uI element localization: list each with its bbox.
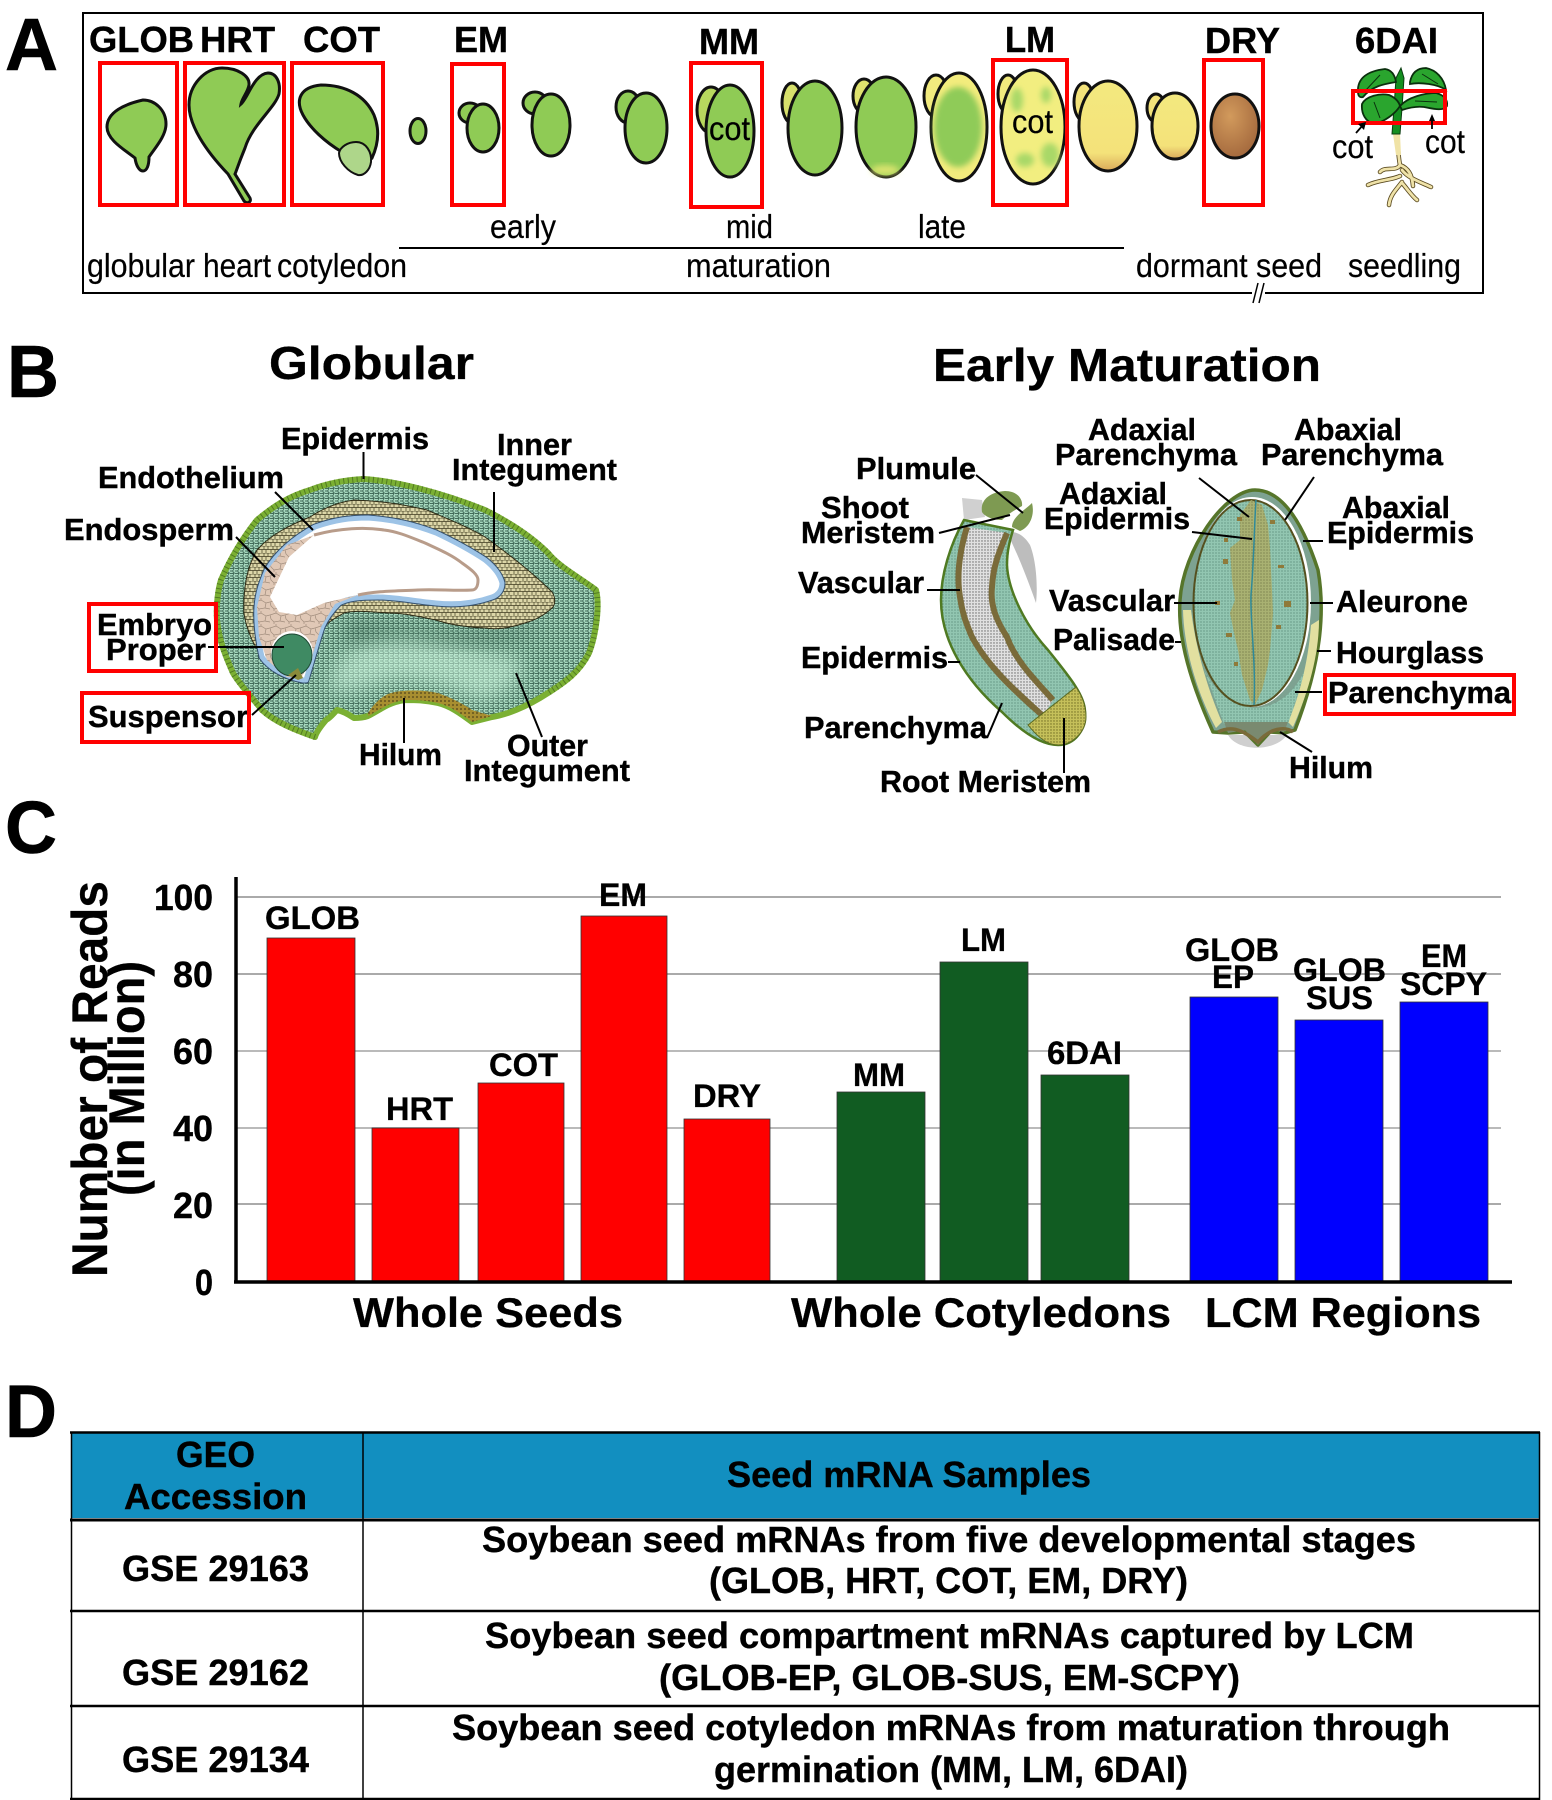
early maturation labels: Parenchyma — [1055, 437, 1238, 472]
suspensor highlight — [82, 693, 249, 742]
y-axis tick labels: 80 — [173, 954, 213, 995]
embryo proper highlight — [89, 604, 216, 671]
globular labels: Integument — [464, 753, 630, 788]
early maturation seed EM — [459, 103, 499, 152]
stage abbreviations — [89, 19, 1438, 62]
stage abbreviations: COT — [303, 19, 380, 60]
early maturation leader lines — [927, 475, 1333, 773]
panel letter D: D — [5, 1370, 57, 1453]
stage abbreviations: MM — [699, 21, 759, 62]
bar labels: SCPY — [1400, 966, 1487, 1002]
phase labels: early — [490, 208, 556, 245]
globular labels: Hilum — [359, 737, 442, 772]
early seed 2 — [523, 92, 570, 156]
mid seed 2 — [782, 81, 842, 175]
panel D: GEO accession table — [5, 1370, 1540, 1800]
cotyledon embryo — [299, 85, 378, 175]
panel B: seed anatomy — [7, 330, 1514, 799]
bar labels: EM — [599, 877, 647, 913]
phase labels: seedling — [1348, 247, 1461, 284]
row: GSE 29134 — [122, 1707, 1450, 1790]
y-axis tick labels: 60 — [173, 1031, 213, 1072]
early maturation labels: Parenchyma — [804, 710, 988, 745]
bar labels: LM — [961, 922, 1006, 958]
bar labels — [265, 877, 1487, 1127]
y-axis tick labels: 20 — [173, 1185, 213, 1226]
icon: seedling — [1358, 68, 1447, 205]
heading: Globular: Globular — [269, 337, 474, 389]
yellow seed — [1074, 81, 1137, 171]
axis break mark — [1253, 283, 1264, 303]
phase labels: maturation — [686, 247, 831, 284]
dry seed — [1211, 94, 1259, 158]
bar labels: GLOB — [1185, 932, 1279, 968]
globular labels: Inner — [497, 427, 572, 462]
table header text: GEO — [176, 1434, 255, 1475]
row: GSE 29162: Soybean seed compartment mRNAs captured by LCM — [485, 1615, 1414, 1656]
globular labels: Proper — [106, 632, 206, 667]
phase labels — [87, 208, 1461, 284]
early maturation labels: Epidermis — [1044, 501, 1190, 536]
stage abbreviations: GLOB — [89, 19, 194, 60]
group labels: Whole Cotyledons — [791, 1289, 1171, 1336]
stage abbreviations: HRT — [200, 19, 275, 60]
stage abbreviations: EM — [454, 19, 508, 60]
row: GSE 29162: GSE 29162 — [122, 1652, 309, 1693]
globular labels: Integument — [452, 452, 617, 487]
row: GSE 29163: Soybean seed mRNAs from five developmental stages — [482, 1519, 1416, 1560]
stage timeline frame — [83, 13, 1483, 293]
globular labels — [64, 421, 630, 788]
phase labels: late — [918, 208, 966, 245]
globular labels: Endothelium — [98, 460, 284, 495]
early maturation labels — [798, 412, 1512, 799]
heading: Early Maturation: Early Maturation — [933, 339, 1321, 391]
bar labels: DRY — [693, 1078, 761, 1114]
late seed 2 — [924, 73, 987, 181]
y-axis title — [62, 881, 155, 1277]
globular labels: Outer — [507, 728, 588, 763]
globular labels: Suspensor — [88, 699, 248, 734]
late maturation seed LM — [998, 70, 1065, 184]
row: GSE 29134: germination (MM, LM, 6DAI) — [714, 1749, 1188, 1790]
gridlines — [236, 897, 1501, 1204]
y-axis title: Number of Reads — [62, 881, 118, 1277]
cotyledon labels and arrows: cot — [1425, 123, 1465, 160]
early maturation labels: Palisade — [1053, 622, 1175, 657]
bar labels: SUS — [1306, 980, 1373, 1016]
table header fill — [71, 1433, 1540, 1518]
phase labels: globular — [87, 247, 195, 284]
early maturation labels: Root Meristem — [880, 764, 1091, 799]
panel letter C: C — [5, 786, 57, 869]
phase labels: dormant seed — [1136, 247, 1322, 284]
mid maturation seed MM — [697, 85, 754, 177]
row: GSE 29163 — [122, 1519, 1416, 1601]
stage abbreviations: DRY — [1205, 20, 1280, 61]
bar labels: HRT — [386, 1091, 453, 1127]
early maturation labels: Adaxial — [1059, 476, 1167, 511]
small early seed — [410, 118, 426, 144]
early maturation labels: Plumule — [856, 451, 976, 486]
panel A: seed development stages — [5, 3, 1483, 303]
red bars: whole seeds — [267, 916, 770, 1282]
heart embryo — [189, 68, 279, 203]
cotyledon labels and arrows: cot — [1332, 128, 1373, 165]
y-axis tick labels: 0 — [195, 1262, 213, 1303]
globular labels: Endosperm — [64, 512, 234, 547]
cotyledon labels and arrows — [709, 103, 1465, 165]
group labels: LCM Regions — [1205, 1289, 1481, 1336]
stage abbreviations: LM — [1005, 19, 1055, 60]
embryos and seeds — [107, 68, 1259, 203]
early maturation labels: Parenchyma — [1328, 675, 1512, 710]
bar labels: GLOB — [1293, 952, 1386, 988]
early maturation labels: Hourglass — [1336, 635, 1484, 670]
longitudinal embryo illustration — [941, 491, 1086, 745]
row: GSE 29134: Soybean seed cotyledon mRNAs from maturation through — [452, 1707, 1450, 1748]
row: GSE 29134: GSE 29134 — [122, 1739, 309, 1780]
bar labels: COT — [489, 1047, 558, 1083]
globular seed section illustration — [217, 479, 598, 737]
yellow seed small — [1147, 93, 1198, 159]
globular embryo — [107, 100, 166, 171]
cotyledon labels and arrows: cot — [709, 110, 750, 147]
row: GSE 29162: (GLOB-EP, GLOB-SUS, EM-SCPY) — [659, 1657, 1240, 1698]
early maturation labels: Shoot — [821, 490, 909, 525]
y-axis tick labels — [154, 877, 213, 1303]
parenchyma highlight — [1325, 675, 1514, 714]
phase labels: cotyledon — [277, 247, 407, 284]
phase labels: mid — [726, 208, 773, 245]
globular labels: Embryo — [97, 607, 212, 642]
early maturation labels: Abaxial — [1342, 490, 1450, 525]
globular labels: Epidermis — [281, 421, 429, 456]
stage abbreviations: 6DAI — [1355, 20, 1438, 61]
early maturation labels: Parenchyma — [1261, 437, 1444, 472]
early maturation labels: Hilum — [1289, 750, 1373, 785]
y-axis tick labels: 40 — [173, 1108, 213, 1149]
early seed 3 — [616, 91, 667, 163]
y-axis tick labels: 100 — [154, 877, 213, 918]
cross-section seed illustration — [1180, 490, 1321, 748]
row: GSE 29163: (GLOB, HRT, COT, EM, DRY) — [709, 1560, 1188, 1601]
early maturation labels: Vascular — [1049, 583, 1175, 618]
late seed 1 — [853, 77, 916, 177]
early maturation labels: Abaxial — [1294, 412, 1402, 447]
green bars: whole cotyledons — [837, 962, 1129, 1282]
table header text: Seed mRNA Samples — [727, 1454, 1091, 1495]
globular leader lines — [208, 452, 542, 743]
bar labels: GLOB — [265, 900, 360, 936]
table rules — [70, 1432, 1540, 1800]
bar labels: 6DAI — [1047, 1035, 1122, 1071]
panel C: read count bar chart — [5, 786, 1512, 1336]
maturation rule — [399, 247, 1124, 249]
early maturation labels: Epidermis — [801, 640, 948, 675]
table header text — [124, 1434, 1091, 1517]
red highlight boxes — [100, 60, 1445, 207]
group labels — [353, 1289, 1481, 1336]
cotyledon labels and arrows: cot — [1012, 103, 1053, 140]
y-axis title: (in Million) — [99, 961, 155, 1196]
panel letter B: B — [7, 330, 59, 413]
early maturation labels: Adaxial — [1088, 412, 1196, 447]
row: GSE 29163: GSE 29163 — [122, 1548, 309, 1589]
bar labels: EP — [1212, 959, 1254, 995]
bar labels: MM — [853, 1057, 905, 1093]
blue bars: LCM regions — [1190, 997, 1488, 1282]
early maturation labels: Epidermis — [1327, 515, 1474, 550]
chart axes — [234, 877, 1512, 1282]
bar labels: EM — [1421, 938, 1467, 974]
group labels: Whole Seeds — [353, 1289, 623, 1336]
phase labels: heart — [203, 247, 271, 284]
row: GSE 29162 — [122, 1615, 1414, 1698]
early maturation labels: Aleurone — [1336, 584, 1468, 619]
early maturation labels: Meristem — [801, 515, 935, 550]
panel letter A: A — [5, 3, 58, 86]
table header text: Accession — [124, 1476, 307, 1517]
early maturation labels: Vascular — [798, 565, 924, 600]
